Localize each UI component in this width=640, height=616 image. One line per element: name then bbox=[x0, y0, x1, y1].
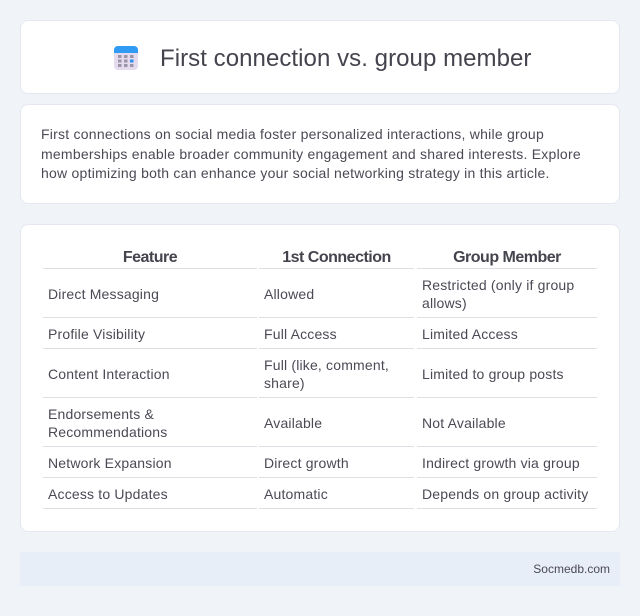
row: Content Interaction: share) bbox=[264, 375, 305, 391]
row: Direct Messaging: Restricted (only if group bbox=[422, 277, 574, 293]
row: Endorsements & Recommendations: Endorsements & bbox=[48, 406, 154, 422]
row: Access to Updates: Access to Updates bbox=[48, 486, 168, 502]
footer bar bbox=[20, 552, 620, 586]
row: Endorsements & Recommendations: Not Available bbox=[422, 415, 506, 431]
row: Network Expansion: Direct growth bbox=[264, 455, 349, 471]
intro text: First connections on social media foster personalized interactions, while group bbox=[41, 126, 544, 142]
panel: intro text card bbox=[20, 104, 620, 204]
row: Endorsements & Recommendations bbox=[43, 406, 597, 447]
table header: Group Member bbox=[453, 249, 561, 266]
row: Network Expansion bbox=[43, 455, 597, 478]
footer text: Socmedb.com bbox=[533, 562, 610, 576]
intro text: how optimizing both can enhance your social networking strategy in this article. bbox=[41, 165, 550, 181]
intro text: memberships enable broader community engagement and shared interests. Explore bbox=[41, 146, 581, 162]
row: Network Expansion: Indirect growth via group bbox=[422, 455, 580, 471]
row: Profile Visibility: Profile Visibility bbox=[48, 326, 145, 342]
row: Content Interaction: Content Interaction bbox=[48, 366, 170, 382]
row: Access to Updates bbox=[43, 486, 597, 509]
row: Direct Messaging: Direct Messaging bbox=[48, 286, 159, 302]
row: Direct Messaging: Allowed bbox=[264, 286, 314, 302]
panel: comparison table card bbox=[20, 224, 620, 532]
row: Direct Messaging: allows) bbox=[422, 295, 467, 311]
row: Network Expansion: Network Expansion bbox=[48, 455, 172, 471]
row: Content Interaction: Full (like, comment, bbox=[264, 357, 389, 373]
icon: calendar bbox=[114, 46, 138, 70]
row: Content Interaction bbox=[43, 357, 597, 398]
row: Endorsements & Recommendations: Recommendations bbox=[48, 424, 167, 440]
row: Profile Visibility: Full Access bbox=[264, 326, 337, 342]
table header: 1st Connection bbox=[282, 249, 391, 266]
row: Content Interaction: Limited to group posts bbox=[422, 366, 564, 382]
table header: Feature bbox=[123, 249, 177, 266]
table header bbox=[43, 249, 597, 269]
intro text bbox=[41, 126, 581, 181]
row: Profile Visibility: Limited Access bbox=[422, 326, 518, 342]
row: Direct Messaging bbox=[43, 277, 597, 318]
row: Access to Updates: Automatic bbox=[264, 486, 328, 502]
row: Access to Updates: Depends on group activity bbox=[422, 486, 588, 502]
row: Profile Visibility bbox=[43, 326, 597, 349]
title: First connection vs. group member bbox=[160, 45, 531, 72]
panel: title card bbox=[20, 20, 620, 94]
row: Endorsements & Recommendations: Available bbox=[264, 415, 322, 431]
